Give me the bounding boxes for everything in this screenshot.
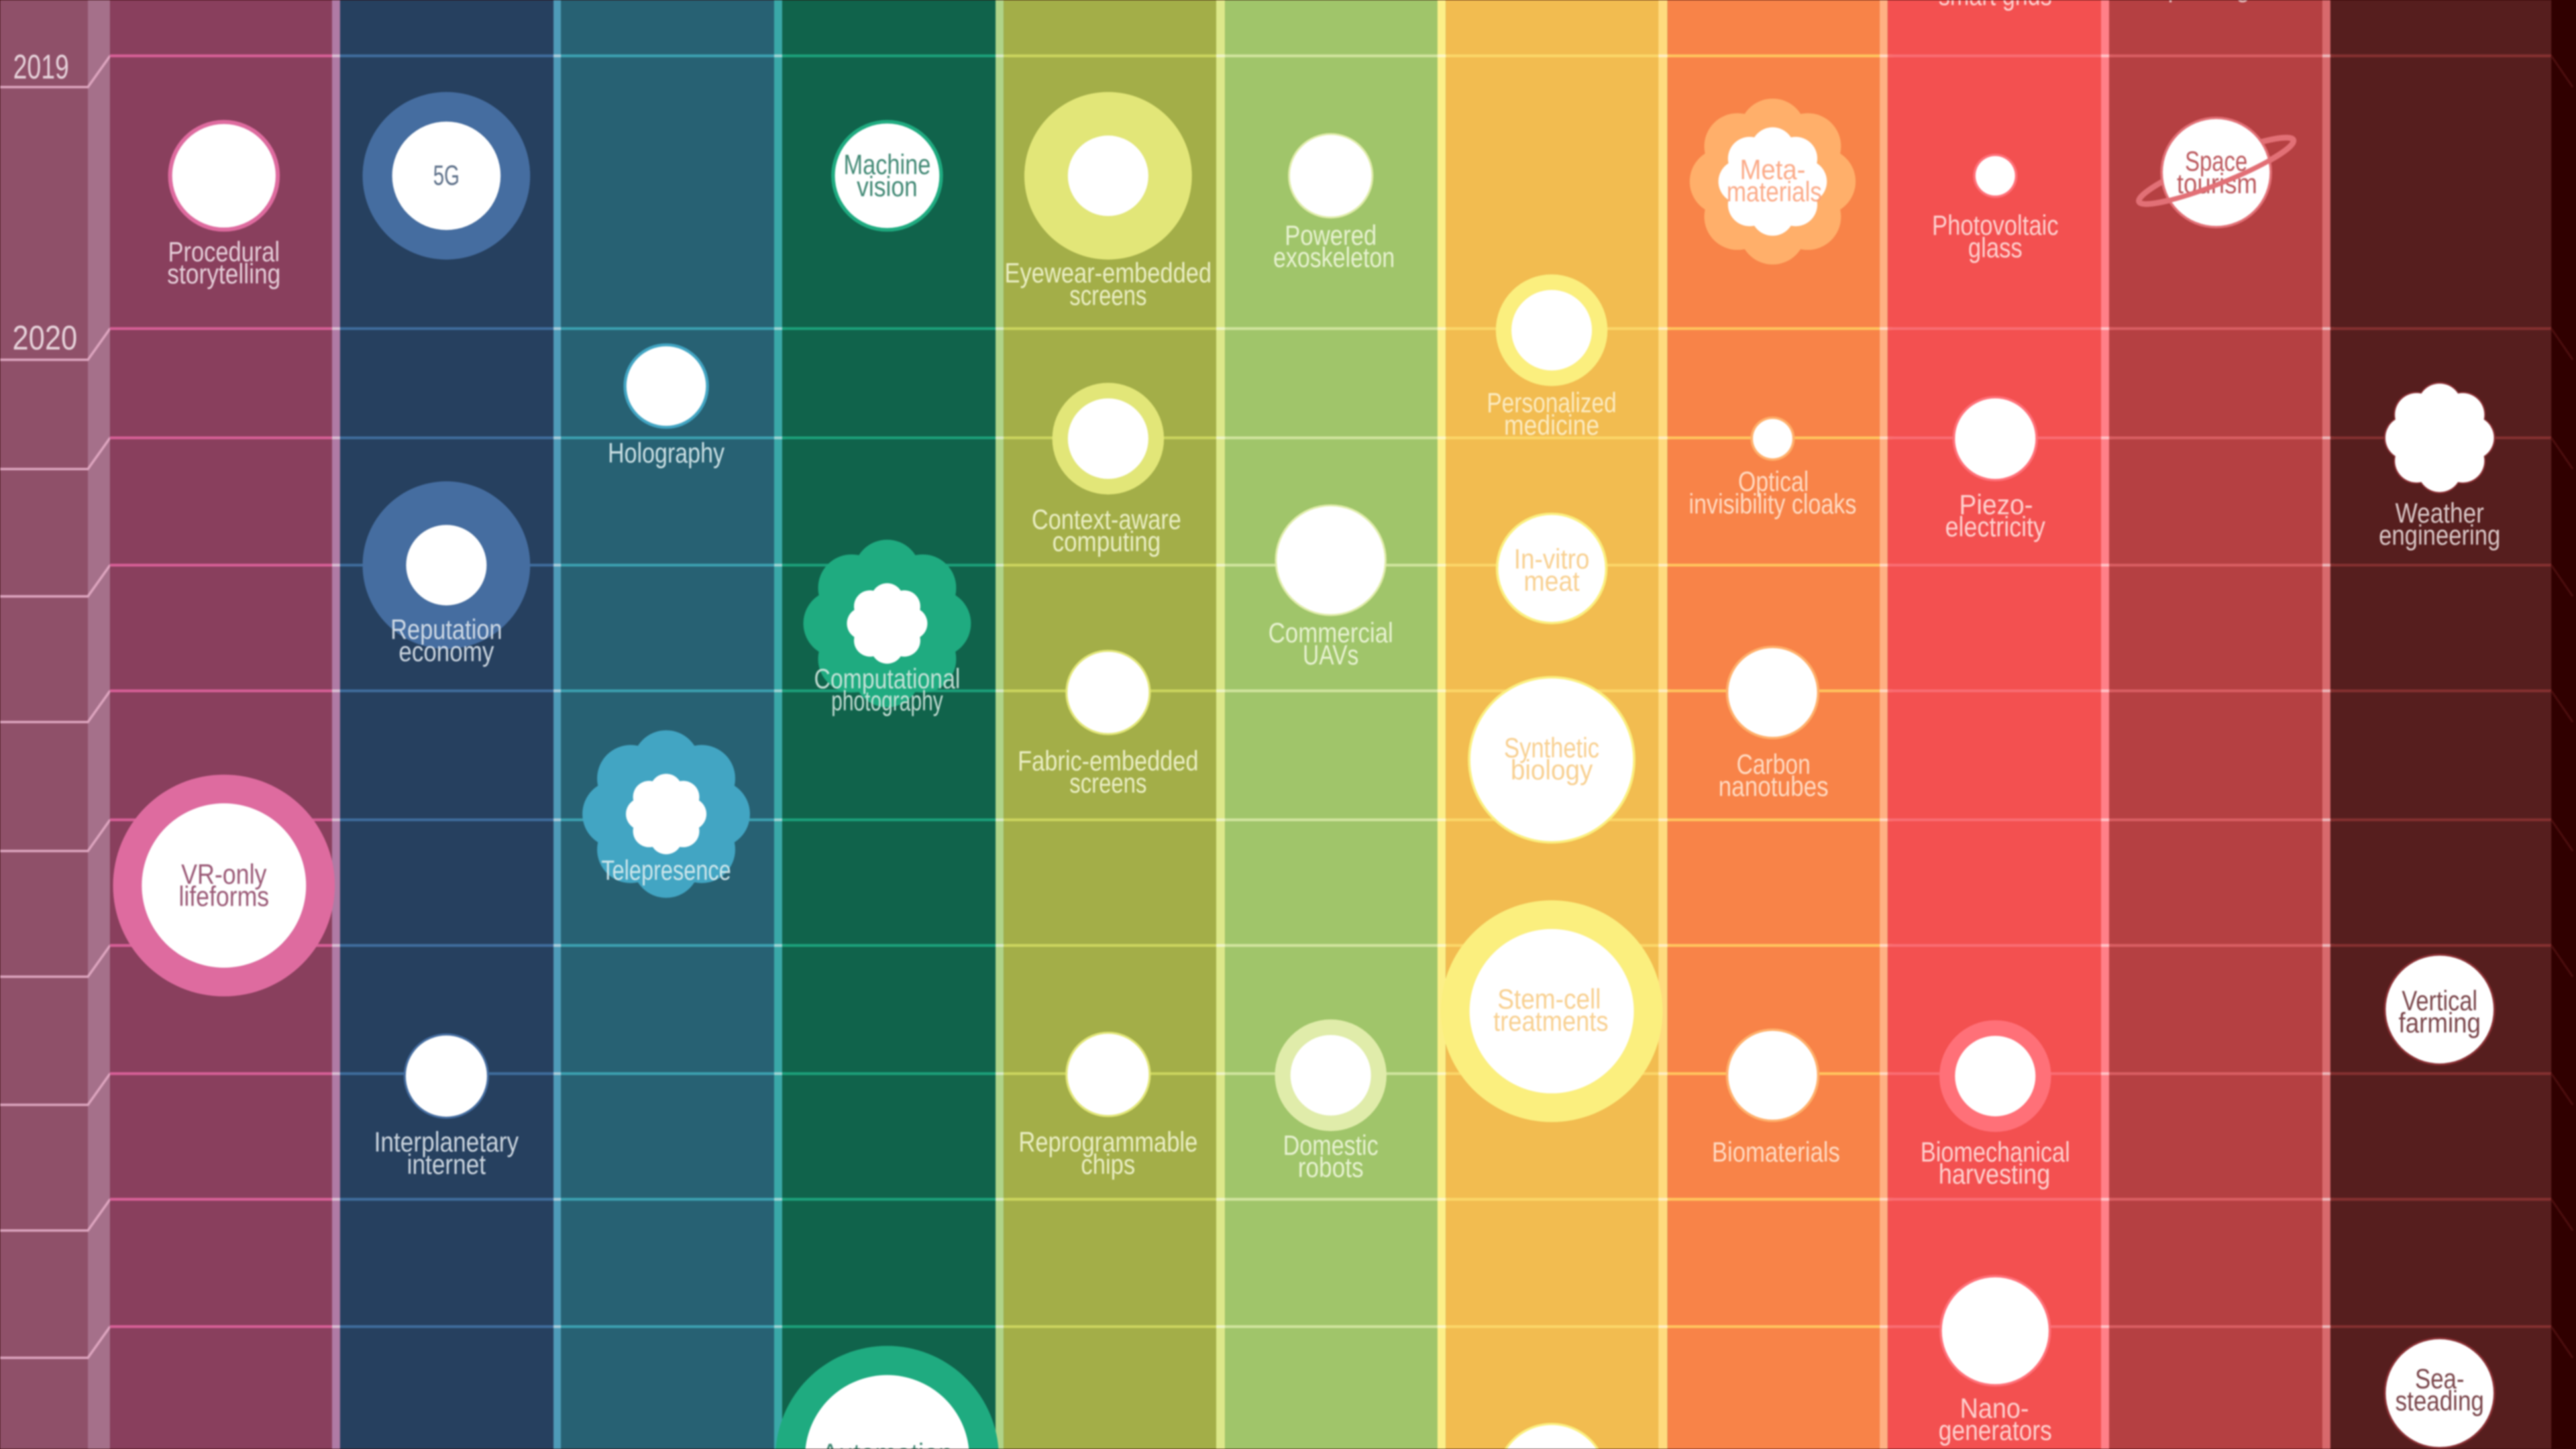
node: metamaterials: materials: [1727, 176, 1822, 207]
node: telepresence: Telepresence: [601, 854, 731, 885]
node: machine vision: vision: [857, 171, 918, 203]
node: fabric-embedded screens: Fabric-embedded: [1018, 745, 1199, 777]
node: domestic robots: [1275, 1020, 1387, 1183]
node: biomechanical harvesting: [1921, 1020, 2070, 1189]
node: synthetic biology: biology: [1511, 754, 1593, 786]
node: metamaterials: Meta-: [1739, 154, 1805, 185]
node: seasteading: [2383, 1337, 2496, 1449]
node: computational photography: photography: [831, 685, 943, 716]
node: space tourism, planet icon with ring: tourism: [2177, 168, 2257, 199]
node: commercial UAVs: [1269, 504, 1393, 671]
node: 5G: [362, 92, 530, 260]
node: partial circle cut off by bottom edge: [1505, 1423, 1599, 1449]
node: piezoelectricity: Piezo-: [1959, 489, 2033, 521]
node: holography: Holography: [608, 437, 724, 468]
node: reputation economy: economy: [398, 636, 494, 667]
node: commercial UAVs: Commercial: [1269, 617, 1393, 649]
node: context-aware computing: Context-aware: [1032, 504, 1181, 535]
node: fabric-embedded screens: screens: [1069, 767, 1146, 799]
node: carbon nanotubes: Carbon: [1737, 748, 1811, 780]
node: interplanetary internet: [374, 1033, 519, 1180]
node: space tourism, planet icon with ring: Space: [2185, 146, 2247, 177]
node: in-vitro meat: In-vitro: [1514, 543, 1589, 574]
node: computational photography: Computational: [814, 663, 960, 694]
node: biomaterials: [1712, 1028, 1840, 1167]
node: biomechanical harvesting: Biomechanical: [1921, 1136, 2070, 1167]
year label 2019: 2019: [13, 47, 69, 86]
node: weather engineering: [2379, 382, 2500, 551]
node: procedural storytelling: Procedural: [168, 235, 280, 267]
node: interplanetary internet: Interplanetary: [374, 1126, 519, 1158]
node: optical invisibility cloaks: invisibility cloaks: [1689, 488, 1856, 519]
node: weather engineering: engineering: [2379, 519, 2500, 551]
node: optical invisibility cloaks: Optical: [1738, 466, 1809, 497]
node: computational photography: [804, 539, 971, 716]
node: reputation economy: Reputation: [390, 614, 502, 645]
node: personalized medicine: Personalized: [1487, 387, 1617, 419]
node: fabric-embedded screens: [1018, 650, 1199, 799]
node: vertical farming: [2383, 954, 2496, 1065]
node: space tourism, planet icon with ring: [2134, 117, 2298, 228]
node: seasteading: Sea-: [2415, 1362, 2464, 1394]
node: nanogenerators: Nano-: [1960, 1392, 2029, 1424]
node: reputation economy: [362, 482, 530, 667]
node: stem-cell treatments: Stem-cell: [1497, 983, 1601, 1015]
node: biomaterials: Biomaterials: [1712, 1136, 1840, 1167]
node: eyewear-embedded screens: screens: [1069, 279, 1146, 311]
node: stem-cell treatments: [1441, 900, 1662, 1122]
node: automation, cut off by bottom edge: [775, 1346, 998, 1449]
node: personalized medicine: [1487, 274, 1617, 441]
node: nanogenerators: [1939, 1275, 2052, 1446]
node: nanogenerators: generators: [1939, 1415, 2052, 1446]
node: holography: [608, 343, 724, 468]
node: in-vitro meat: [1496, 513, 1607, 625]
node: reprogrammable chips: chips: [1081, 1148, 1135, 1180]
node: reprogrammable chips: [1018, 1032, 1197, 1180]
node: machine vision: Machine: [844, 149, 930, 180]
node: biomechanical harvesting: harvesting: [1939, 1158, 2050, 1189]
node: carbon nanotubes: [1719, 645, 1829, 802]
node: powered exoskeleton: [1273, 133, 1395, 273]
node: piezoelectricity: electricity: [1945, 511, 2045, 543]
node: domestic robots: robots: [1298, 1152, 1364, 1183]
node: powered exoskeleton: exoskeleton: [1273, 241, 1395, 273]
node: context-aware computing: computing: [1053, 526, 1161, 557]
node: photovoltaic glass: [1932, 154, 2059, 263]
node: commercial UAVs: UAVs: [1303, 639, 1358, 671]
node: VR-only lifeforms: VR-only: [181, 859, 267, 890]
node: in-vitro meat: meat: [1523, 565, 1580, 596]
node: stem-cell treatments: treatments: [1493, 1006, 1609, 1037]
node: personalized medicine: medicine: [1504, 409, 1599, 441]
node: seasteading: steading: [2396, 1385, 2484, 1416]
node: machine vision: [831, 120, 943, 231]
node: metamaterials: [1690, 99, 1856, 264]
node: weather engineering: Weather: [2396, 497, 2484, 529]
node: synthetic biology: [1468, 676, 1635, 844]
node: optical invisibility cloaks: [1689, 417, 1856, 519]
node: carbon nanotubes: nanotubes: [1719, 771, 1829, 802]
node: 5G: 5G: [433, 160, 460, 191]
node: telepresence: [582, 731, 750, 898]
node: domestic robots: Domestic: [1283, 1130, 1379, 1161]
panel: year axis: [0, 0, 110, 1449]
node: VR-only lifeforms: lifeforms: [178, 881, 269, 912]
node: photovoltaic glass: Photovoltaic: [1932, 209, 2059, 241]
node: reprogrammable chips: Reprogrammable: [1018, 1126, 1197, 1158]
node: procedural storytelling: storytelling: [167, 258, 280, 289]
node: context-aware computing: [1032, 383, 1181, 557]
node: piezoelectricity: [1945, 396, 2045, 543]
node: vertical farming: Vertical: [2402, 985, 2477, 1016]
node: photovoltaic glass: glass: [1968, 231, 2023, 263]
node: eyewear-embedded screens: [1005, 92, 1212, 311]
node: interplanetary internet: internet: [407, 1148, 486, 1180]
year label 2020: 2020: [12, 318, 77, 357]
node: synthetic biology: Synthetic: [1504, 732, 1599, 763]
node: VR-only lifeforms: [113, 775, 335, 996]
node: vertical farming: farming: [2399, 1007, 2481, 1038]
node: procedural storytelling: [167, 120, 280, 289]
node: powered exoskeleton: Powered: [1285, 219, 1377, 251]
node: eyewear-embedded screens: Eyewear-embedded: [1005, 257, 1212, 288]
